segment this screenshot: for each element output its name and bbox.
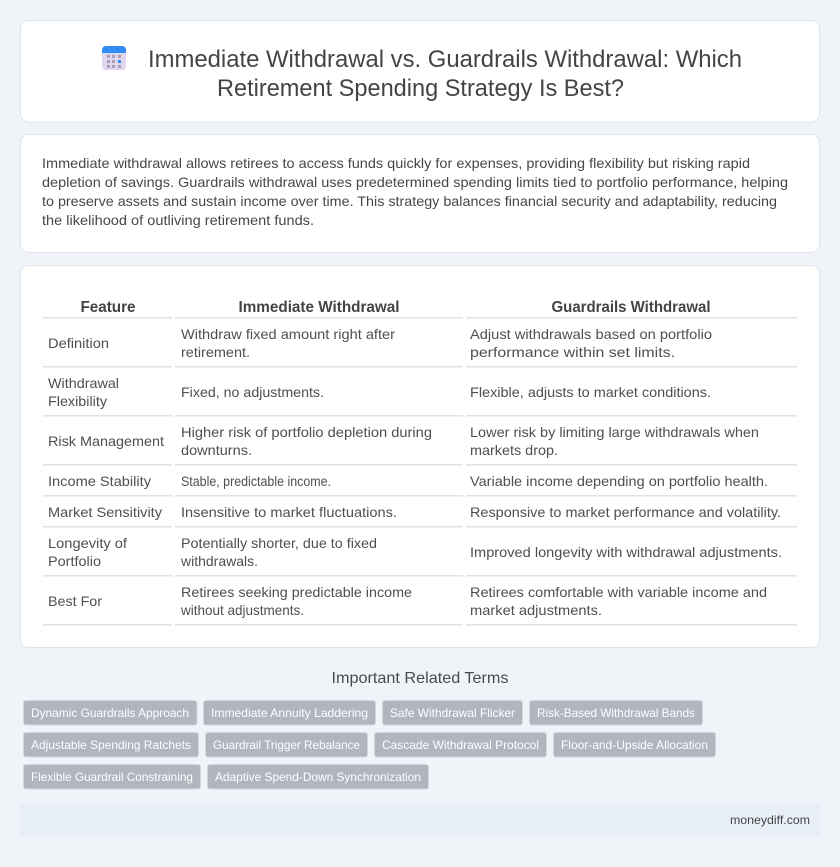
row: longevity of portfolio: withdrawals.: [180, 553, 258, 569]
intro panel: [20, 134, 820, 252]
row: best for: Best For: [48, 593, 102, 609]
comparison table panel: [20, 266, 820, 648]
related terms tags: Safe Withdrawal Flicker: [390, 706, 515, 720]
row: income stability: Income Stability: [48, 473, 151, 489]
intro text: depletion of savings. Guardrails withdrawal uses predetermined spending limits tied to portfolio performance, helping: [42, 174, 788, 190]
intro text: [42, 155, 788, 228]
row: definition: retirement.: [181, 344, 250, 360]
row: definition: Adjust withdrawals based on portfolio: [470, 326, 712, 342]
row: risk management: Higher risk of portfolio depletion during: [181, 424, 432, 440]
row: income stability: [43, 473, 797, 496]
row: longevity of portfolio: Longevity of: [48, 535, 127, 551]
title: Immediate Withdrawal vs. Guardrails Withdrawal: Which: [148, 46, 742, 73]
related terms heading: Important Related Terms: [332, 670, 508, 687]
row: market sensitivity: Insensitive to market fluctuations.: [181, 504, 397, 520]
row: market sensitivity: Market Sensitivity: [48, 504, 162, 520]
row: best for: without adjustments.: [180, 602, 304, 618]
related terms tags: Adaptive Spend-Down Synchronization: [215, 770, 421, 784]
row: best for: market adjustments.: [470, 602, 602, 618]
icon: calendar: [102, 46, 126, 70]
related terms tags: [24, 700, 716, 789]
row: market sensitivity: [43, 504, 797, 527]
title: Retirement Spending Strategy Is Best?: [217, 75, 624, 102]
row: longevity of portfolio: Portfolio: [48, 553, 101, 569]
related terms tags: Immediate Annuity Laddering: [211, 706, 368, 720]
intro text: Immediate withdrawal allows retirees to access funds quickly for expenses, providing flexibility but risking rapid: [42, 155, 750, 171]
related terms tags: Adjustable Spending Ratchets: [31, 738, 191, 752]
row: longevity of portfolio: [43, 535, 797, 576]
row: withdrawal flexibility: Flexibility: [48, 393, 107, 409]
row: withdrawal flexibility: Fixed, no adjustments.: [181, 384, 324, 400]
row: definition: Withdraw fixed amount right after: [181, 326, 395, 342]
intro text: the likelihood of outliving retirement funds.: [42, 212, 314, 228]
row: definition: Definition: [48, 335, 109, 351]
footer: moneydiff.com: [730, 813, 810, 827]
row: definition: [43, 326, 797, 367]
row: best for: Retirees comfortable with variable income and: [470, 584, 767, 600]
row: risk management: Risk Management: [48, 433, 164, 449]
row: best for: [43, 584, 797, 625]
row: withdrawal flexibility: Flexible, adjusts to market conditions.: [470, 384, 711, 400]
related terms tags: Risk-Based Withdrawal Bands: [537, 706, 695, 720]
table header row: Immediate Withdrawal: [238, 299, 400, 316]
row: income stability: Variable income depending on portfolio health.: [470, 473, 768, 489]
related terms tags: Floor-and-Upside Allocation: [561, 738, 708, 752]
row: market sensitivity: Responsive to market performance and volatility.: [470, 504, 781, 520]
related terms tags: Flexible Guardrail Constraining: [31, 770, 193, 784]
title: [148, 46, 742, 102]
row: risk management: [43, 424, 797, 465]
table header row: [43, 299, 797, 318]
row: income stability: Stable, predictable income.: [181, 473, 331, 489]
table header row: Guardrails Withdrawal: [552, 299, 710, 316]
row: risk management: downturns.: [181, 442, 252, 458]
table header row: Feature: [80, 299, 136, 316]
row: definition: performance within set limits.: [470, 344, 675, 360]
intro text: to preserve assets and sustain income over time. This strategy balances financial security and adaptability, reducing: [42, 193, 777, 209]
row: longevity of portfolio: Improved longevity with withdrawal adjustments.: [470, 544, 782, 560]
row: risk management: Lower risk by limiting large withdrawals when: [470, 424, 759, 440]
related terms tags: Guardrail Trigger Rebalance: [213, 738, 360, 752]
footer: [20, 803, 820, 837]
related terms tags: Cascade Withdrawal Protocol: [382, 738, 539, 752]
related terms tags: Dynamic Guardrails Approach: [31, 706, 189, 720]
row: withdrawal flexibility: [43, 375, 797, 416]
row: best for: Retirees seeking predictable income: [181, 584, 412, 600]
header panel: [20, 20, 820, 122]
row: withdrawal flexibility: Withdrawal: [48, 375, 119, 391]
row: longevity of portfolio: Potentially shorter, due to fixed: [181, 535, 377, 551]
row: risk management: markets drop.: [470, 442, 558, 458]
